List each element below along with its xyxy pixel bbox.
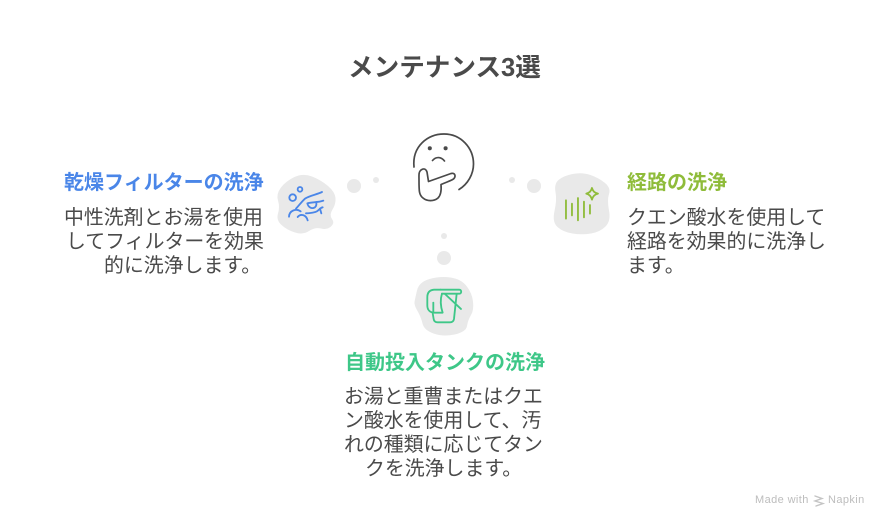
connector dots: bottom [437,233,451,265]
text: filter cleaning description [64,206,264,277]
panel: path cleaning [627,172,826,277]
text: path cleaning description [627,206,826,277]
footer: made with Napkin: Napkin [828,494,865,506]
text: path cleaning description: クエン酸水を使用して [627,207,825,229]
connector dots: right [509,177,541,193]
connector dots: left [347,177,379,193]
text: tank cleaning description: クを洗浄します。 [365,458,522,480]
text: path cleaning description: 経路を効果的に洗浄し [627,231,826,253]
icon: thinking face [414,134,474,201]
text: tank cleaning description: ン酸水を使用して、汚 [344,410,541,432]
panel: filter cleaning [64,172,264,277]
heading: filter cleaning: 乾燥フィルターの洗浄 [64,172,264,194]
icon: sparkle and lines on blob [554,173,610,234]
text: path cleaning description: ます。 [627,255,685,277]
icon: filter on blob [277,175,336,233]
icon: bucket on blob [414,277,473,336]
text: filter cleaning description: してフィルターを効果 [66,231,264,253]
text: tank cleaning description: お湯と重曹またはクエ [344,386,543,408]
icon: Napkin logo [815,496,823,506]
footer: made with Napkin: Made with [755,494,809,506]
text: tank cleaning description: れの種類に応じてタン [344,434,543,456]
text: filter cleaning description: 的に洗浄します。 [104,255,261,277]
text: filter cleaning description: 中性洗剤とお湯を使用 [64,207,263,229]
heading: tank cleaning: 自動投入タンクの洗浄 [345,352,545,374]
footer: made with Napkin [755,494,865,506]
text: tank cleaning description [344,386,543,480]
panel: tank cleaning [344,352,545,480]
title: メンテナンス3選 [348,54,541,82]
heading: path cleaning: 経路の洗浄 [627,172,727,194]
